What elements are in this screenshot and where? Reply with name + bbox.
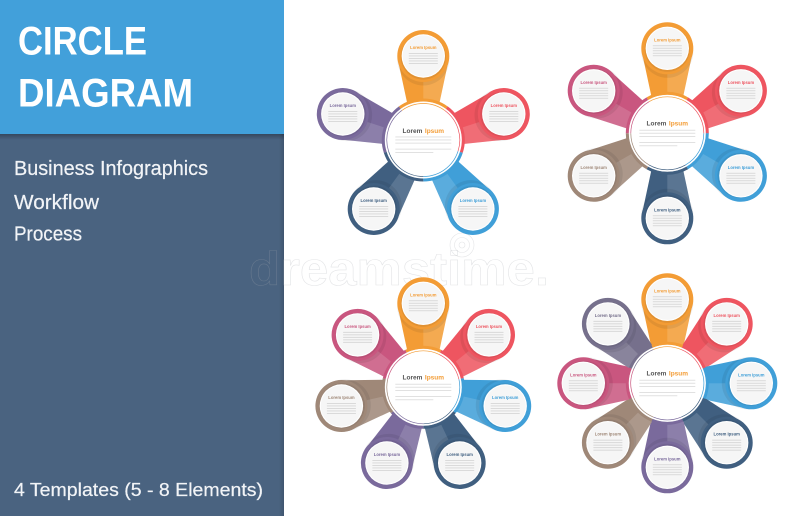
hub — [367, 84, 479, 196]
petal: purple: Lorem Ipsum — [374, 452, 400, 457]
petal: blue — [701, 357, 777, 409]
petal: orange — [641, 22, 693, 98]
petal: red — [685, 55, 776, 138]
diagram: five elements — [310, 30, 537, 245]
petal: blue — [422, 153, 509, 245]
petal: red: Lorem Ipsum — [714, 313, 740, 318]
petal: blue: Lorem Ipsum — [738, 372, 765, 377]
petal: orange — [397, 30, 449, 106]
petal: navy — [641, 168, 693, 244]
text: template count: 4 Templates (5 - 8 Elements) — [14, 479, 263, 500]
petal: pink: Lorem Ipsum — [581, 80, 607, 85]
petal: blue: Lorem Ipsum — [728, 165, 754, 170]
petal: orange: Lorem Ipsum — [654, 37, 681, 42]
petal: purple: Lorem Ipsum — [654, 456, 681, 461]
petal: brown — [310, 370, 396, 437]
petal: blue — [685, 128, 776, 211]
hub: Lorem Ipsum — [647, 120, 688, 127]
text: process: Process — [14, 224, 82, 246]
petal: orange — [641, 273, 693, 349]
petal: orange: Lorem Ipsum — [410, 45, 437, 50]
petal: pink: Lorem Ipsum — [344, 324, 371, 329]
hub — [367, 331, 480, 444]
diagram: seven elements — [310, 277, 536, 498]
petal: navy — [673, 389, 763, 479]
petal: pink — [557, 357, 633, 409]
petal: blue — [451, 370, 536, 437]
petal: purple — [641, 417, 693, 493]
title: diagram: DIAGRAM — [18, 72, 193, 116]
petal: navy — [337, 153, 424, 245]
petal: brown — [558, 128, 650, 211]
petal: red — [434, 298, 526, 386]
petal: red: Lorem Ipsum — [476, 324, 502, 329]
petal: purple — [310, 81, 398, 154]
diagram: eight elements — [557, 273, 777, 493]
petal: red: Lorem Ipsum — [728, 80, 754, 85]
petal: brown: Lorem Ipsum — [595, 432, 621, 437]
petal: brown: Lorem Ipsum — [328, 395, 355, 400]
petal: orange: Lorem Ipsum — [654, 288, 681, 293]
hub: Lorem Ipsum — [647, 370, 688, 377]
petal: navy: Lorem Ipsum — [714, 432, 740, 437]
diagram: six elements — [558, 22, 776, 244]
hub — [613, 79, 722, 188]
petal: orange — [397, 277, 449, 353]
petal: blue: Lorem Ipsum — [460, 198, 486, 203]
watermark: dreamstime. — [249, 242, 549, 295]
hub — [615, 331, 720, 436]
petal: navy: Lorem Ipsum — [447, 452, 473, 457]
hub: Lorem Ipsum — [403, 374, 444, 381]
petal: orange: Lorem Ipsum — [410, 292, 437, 297]
petal: red — [448, 81, 537, 154]
panel: title block — [0, 0, 284, 134]
petal: purple: Lorem Ipsum — [330, 103, 356, 108]
petal: brown — [571, 389, 662, 479]
title: circle: CIRCLE — [18, 20, 147, 64]
petal: pink: Lorem Ipsum — [570, 372, 597, 377]
petal: grey purple — [571, 287, 662, 378]
hub: Lorem Ipsum — [403, 128, 444, 135]
petal: red: Lorem Ipsum — [491, 103, 517, 108]
petal: pink — [558, 55, 650, 138]
text: workflow: Workflow — [14, 192, 100, 214]
petal: grey purple: Lorem Ipsum — [595, 313, 621, 318]
petal: blue: Lorem Ipsum — [492, 395, 519, 400]
panel: description sidebar — [0, 134, 284, 516]
petal: navy: Lorem Ipsum — [654, 207, 681, 212]
petal: brown: Lorem Ipsum — [581, 165, 607, 170]
petal: pink — [321, 298, 413, 386]
petal: red — [673, 287, 763, 378]
petal: navy: Lorem Ipsum — [361, 198, 387, 203]
petal: purple — [352, 407, 432, 498]
text: business infographics: Business Infographics — [14, 158, 208, 180]
petal: navy — [415, 407, 494, 498]
